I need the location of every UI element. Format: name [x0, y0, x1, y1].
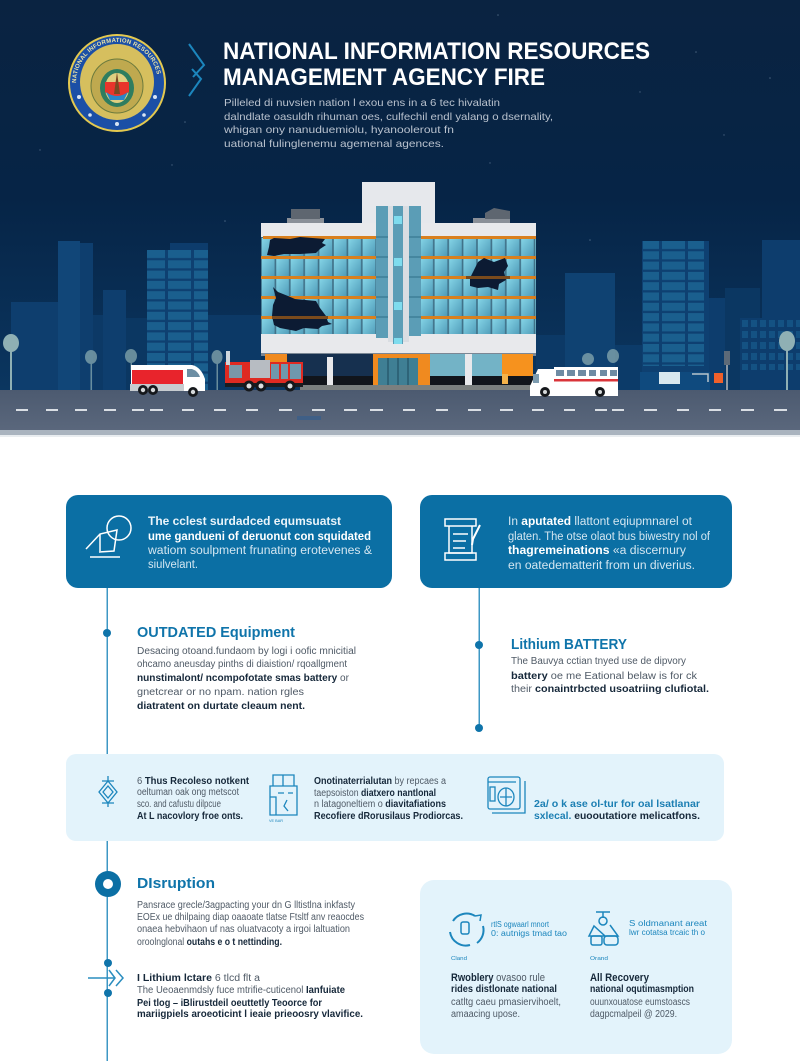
- recovery column one: [451, 972, 561, 1020]
- recovery column two: ouunxouatose eumstoascs: [590, 997, 690, 1008]
- rooftop units: [287, 208, 510, 224]
- icon: server clipboard: [269, 775, 297, 823]
- title: [223, 38, 650, 91]
- icon: circuit panel: [488, 777, 525, 813]
- section: lithium detail: [137, 973, 363, 1020]
- hero: night sky background: [0, 0, 800, 392]
- icon: cooperation group: [589, 912, 618, 945]
- timeline: right: [475, 588, 483, 732]
- window bands: [261, 237, 536, 334]
- timeline: left: [103, 588, 112, 1061]
- fact two: Onotinaterrialutan by repcaes a: [314, 776, 446, 787]
- fact three: 2a/ o k ase ol-tur for oal lsatlanar: [534, 799, 700, 810]
- fact two: [314, 776, 463, 822]
- icon captions: 0: autnigs tmad tao: [491, 929, 568, 938]
- section: lithium detail: mariigpiels aroeoticint l ieaie prieoosry vlavifice.: [137, 1009, 363, 1020]
- recovery column one: catltg caeu pmasiervihoelt,: [451, 997, 561, 1008]
- recovery column two: dagpcmalpeil @ 2029.: [590, 1009, 677, 1020]
- vehicle: white bus: [530, 367, 618, 397]
- fact one: oeltuman oak ong metscot: [137, 787, 239, 798]
- fact three: [534, 799, 700, 822]
- street trees: [3, 331, 795, 390]
- card text: thagremeinations «a discernury: [508, 545, 686, 557]
- card text: [508, 516, 711, 572]
- recovery column one: Rwoblery ovasoo rule: [451, 972, 545, 984]
- central columns: [376, 206, 421, 344]
- card text: ume gandueni of deruonut con squidated: [148, 531, 371, 543]
- section: outdated equipment: gnetcrear or no npam. nation rgles: [137, 687, 304, 698]
- fire damage holes: [267, 237, 510, 331]
- icon captions: rtlS ogwaarl mnort: [491, 920, 550, 929]
- fact two: taepsoiston diatxero nantlonal: [314, 788, 436, 799]
- fact three: sxlecal. euooutatiore melicatfons.: [534, 811, 700, 822]
- section: outdated equipment: OUTDATED Equipment: [137, 624, 295, 641]
- title: MANAGEMENT AGENCY FIRE: [223, 64, 545, 91]
- icon: diamond marker: [99, 776, 117, 807]
- recovery column two: national oqutimasmption: [590, 983, 694, 995]
- recovery column one: rides distlonate national: [451, 983, 557, 995]
- logo seal: NATIONAL INFORMATION RESOURCES: [72, 38, 161, 83]
- recovery column one: amaacing upose.: [451, 1009, 520, 1020]
- background city left: [11, 241, 261, 390]
- section: outdated equipment: diatratent on durtate cleaum nent.: [137, 701, 305, 712]
- card: outdated equipment summary: [66, 495, 392, 588]
- orange floor bands: [261, 236, 536, 319]
- icon captions: Cland: [451, 956, 467, 962]
- card text: siulvelant.: [148, 559, 198, 571]
- fact one: sco. and cafustu dilpcue: [137, 799, 221, 810]
- recovery column two: All Recovery: [590, 972, 650, 984]
- band: recovery facts: [66, 754, 724, 841]
- section: outdated equipment: nunstimalont/ ncompofotate smas battery or: [137, 673, 350, 684]
- fact one: 6 Thus Recoleso notkent: [137, 776, 250, 787]
- section: lithium battery: [511, 636, 709, 695]
- section: disruption: EOEx ue dhilpaing diap oaaoate tlatse Ftsltf anv reaocdes: [137, 912, 364, 923]
- section: lithium battery: their conaintrbcted usoatriing clufiotal.: [511, 684, 709, 695]
- card: lithium battery summary: [420, 495, 732, 588]
- card text: The cclest surdadced equmsuatst: [148, 516, 341, 528]
- fact two: Recofiere dRorusilaus Prodiorcas.: [314, 811, 463, 822]
- title: NATIONAL INFORMATION RESOURCES: [223, 38, 650, 65]
- icon captions: lwr cotatsa trcaic th o: [629, 928, 706, 937]
- vehicle: fire engine: [225, 351, 303, 392]
- icon captions: Orand: [590, 956, 608, 962]
- card text: In aputated llattont eqiupmnarel ot: [508, 516, 693, 528]
- stars: [39, 14, 771, 241]
- ground floor: [261, 353, 536, 385]
- fact one: [137, 776, 250, 822]
- section: lithium detail: Pei tlog – iBlirustdeil oeuttetly Teoorce for: [137, 998, 322, 1009]
- section: disruption: onaea hebvihaon uf nas oluatvacoty a irgoi laltuation: [137, 924, 350, 935]
- logo seal: [68, 34, 166, 132]
- intro text: whigan ony nanuduemiolu, hyanoolerout fn: [223, 124, 454, 136]
- section: lithium battery: Lithium BATTERY: [511, 636, 627, 653]
- intro text: uational fulinglenemu agemenal agences.: [224, 138, 444, 150]
- section: lithium battery: battery oe me Eational belaw is for ck: [511, 671, 698, 682]
- road: [0, 385, 800, 437]
- tower: [362, 182, 435, 232]
- section: disruption: oroolnglonal outahs e o t nettinding.: [137, 937, 282, 948]
- icon captions: S oldmanant areat: [629, 919, 708, 928]
- icon: device: [86, 516, 131, 557]
- icon captions: [451, 919, 708, 962]
- icon: recycling battery: [450, 914, 484, 946]
- fact one: At L nacovlory froe onts.: [137, 811, 243, 822]
- arrow marker: [88, 970, 123, 986]
- section: disruption: Pansrace grecle/3agpacting your dn G lltistlna inkfasty: [137, 900, 355, 911]
- icon: document: [445, 519, 480, 560]
- section: outdated equipment: [137, 624, 356, 712]
- intro text: dalndlate oasuldh rihuman oes, culfechil endl yalang o dsernality,: [224, 111, 553, 123]
- main body: [261, 223, 536, 353]
- vehicle: tanker truck: [130, 365, 205, 397]
- intro text: Pilleled di nuvsien nation l exou ens in a 6 tec hivalatin: [224, 97, 500, 109]
- card text: [147, 516, 372, 571]
- section: lithium detail: I Lithium lctare 6 tlcd flt a: [137, 973, 260, 984]
- section: outdated equipment: ohcamo aneusday pinths di diaistion/ rqoallgment: [137, 659, 347, 670]
- card text: glaten. The otse olaot bus biwestry nol of: [508, 531, 711, 543]
- card text: en oatedematterit from un diverius.: [508, 560, 695, 572]
- panel: all recovery: [420, 880, 732, 1054]
- fact two: n latagoneltiem o diavitafiations: [314, 799, 446, 810]
- section: lithium detail: The Ueoaenmdsly fuce mtrifie-cuticenol Ianfuiate: [137, 985, 345, 996]
- street sign and traffic light: [659, 351, 730, 390]
- icon: server clipboard: VE BAR: [269, 818, 283, 823]
- damaged building: [261, 182, 536, 385]
- section: lithium battery: The Bauvya cctian tnyed use de dipvory: [511, 656, 686, 667]
- section: disruption: DIsruption: [137, 875, 215, 892]
- section: outdated equipment: Desacing otoand.fundaom by logi i oofic mnicitial: [137, 646, 356, 657]
- recovery column two: [590, 972, 694, 1020]
- marker: disruption: [95, 871, 121, 897]
- section: disruption: [95, 871, 364, 948]
- intro text: [223, 97, 553, 150]
- card text: watiom soulpment frunating erotevenes &: [147, 545, 372, 557]
- background city right: [536, 240, 800, 390]
- chevron marks: [189, 44, 204, 96]
